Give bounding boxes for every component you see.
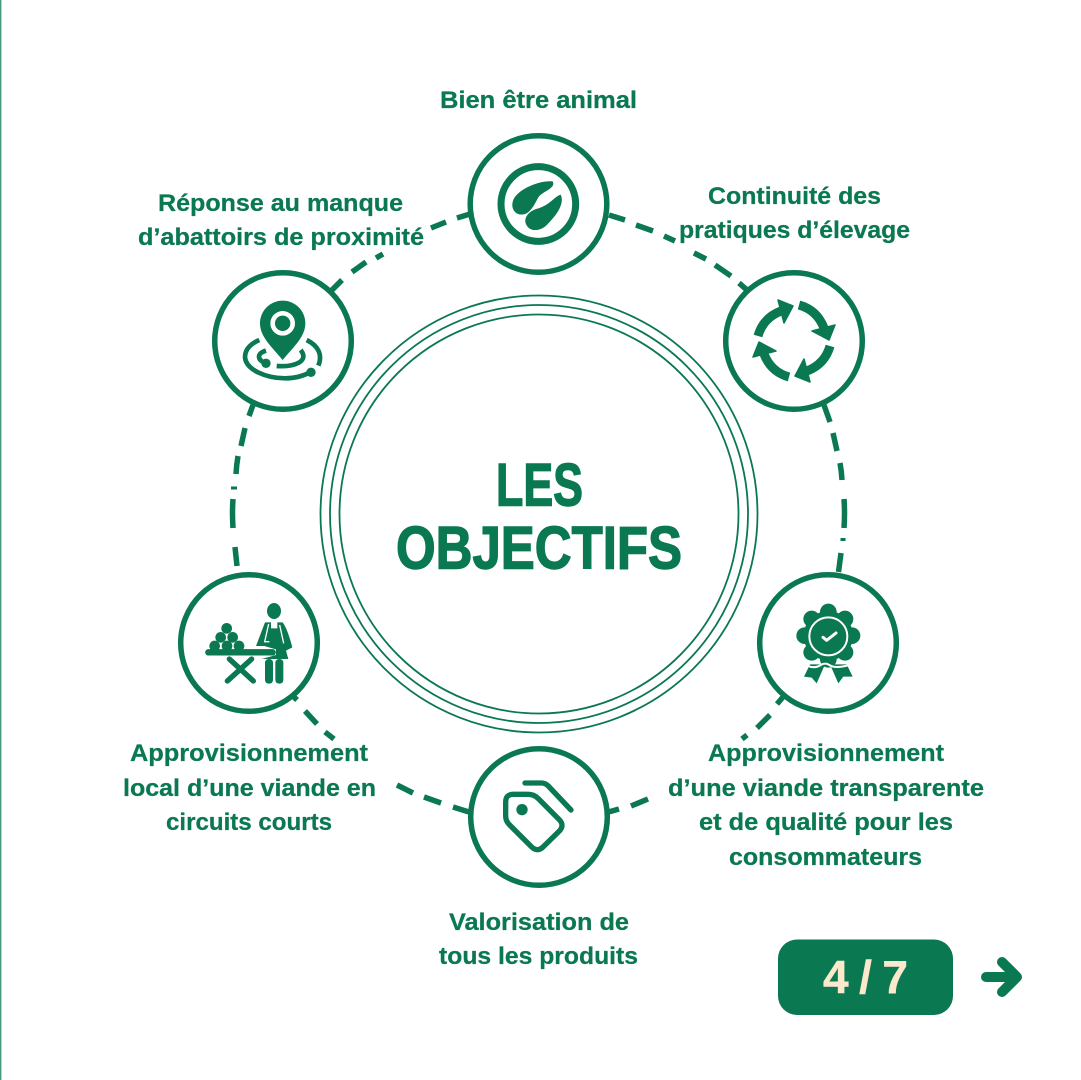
label: valorisation xyxy=(439,909,638,970)
label: approvisionnement qualite: et de qualité pour les xyxy=(699,809,953,836)
label: approvisionnement qualite: Approvisionnement xyxy=(708,740,944,767)
node: transparent quality xyxy=(760,575,896,711)
label: approvisionnement qualite xyxy=(668,740,984,871)
label: approvisionnement qualite: consommateurs xyxy=(729,844,922,871)
central triple ring with title xyxy=(320,296,758,732)
node: product value xyxy=(471,749,607,885)
label: reponse xyxy=(138,190,424,251)
label: valorisation: tous les produits xyxy=(439,943,638,970)
label: valorisation: Valorisation de xyxy=(449,909,629,936)
page counter: 4 / 7 xyxy=(823,951,908,1003)
icon: map pin xyxy=(245,301,320,378)
label: approvisionnement local xyxy=(123,740,376,836)
node: local supply xyxy=(181,575,317,711)
label: continuite xyxy=(679,183,910,244)
node: continuity xyxy=(726,273,862,409)
title: objectifs: OBJECTIFS xyxy=(396,514,682,582)
label: approvisionnement qualite: d’une viande transparente xyxy=(668,775,984,802)
icon: cycle arrows xyxy=(753,300,835,382)
label: approvisionnement local: Approvisionnement xyxy=(130,740,368,767)
node: slaughterhouse proximity xyxy=(215,273,351,409)
label: approvisionnement local: circuits courts xyxy=(166,809,332,836)
label: reponse: Réponse au manque xyxy=(158,190,403,217)
icon: hoof xyxy=(501,167,576,241)
arrow: next page xyxy=(986,962,1017,992)
label: bien etre animal: Bien être animal xyxy=(440,87,637,114)
node: animal welfare xyxy=(470,136,607,272)
dashed connecting ring xyxy=(231,214,846,813)
icon: price tags xyxy=(506,783,571,850)
page counter xyxy=(778,940,953,1015)
icon: butcher at table xyxy=(208,603,292,684)
label: continuite: Continuité des xyxy=(708,183,881,210)
title: les: LES xyxy=(496,452,583,518)
label: approvisionnement local: local d’une viande en xyxy=(123,775,376,802)
icon: rosette badge xyxy=(796,604,860,683)
label: continuite: pratiques d’élevage xyxy=(679,217,910,244)
label: reponse: d’abattoirs de proximité xyxy=(138,224,424,251)
